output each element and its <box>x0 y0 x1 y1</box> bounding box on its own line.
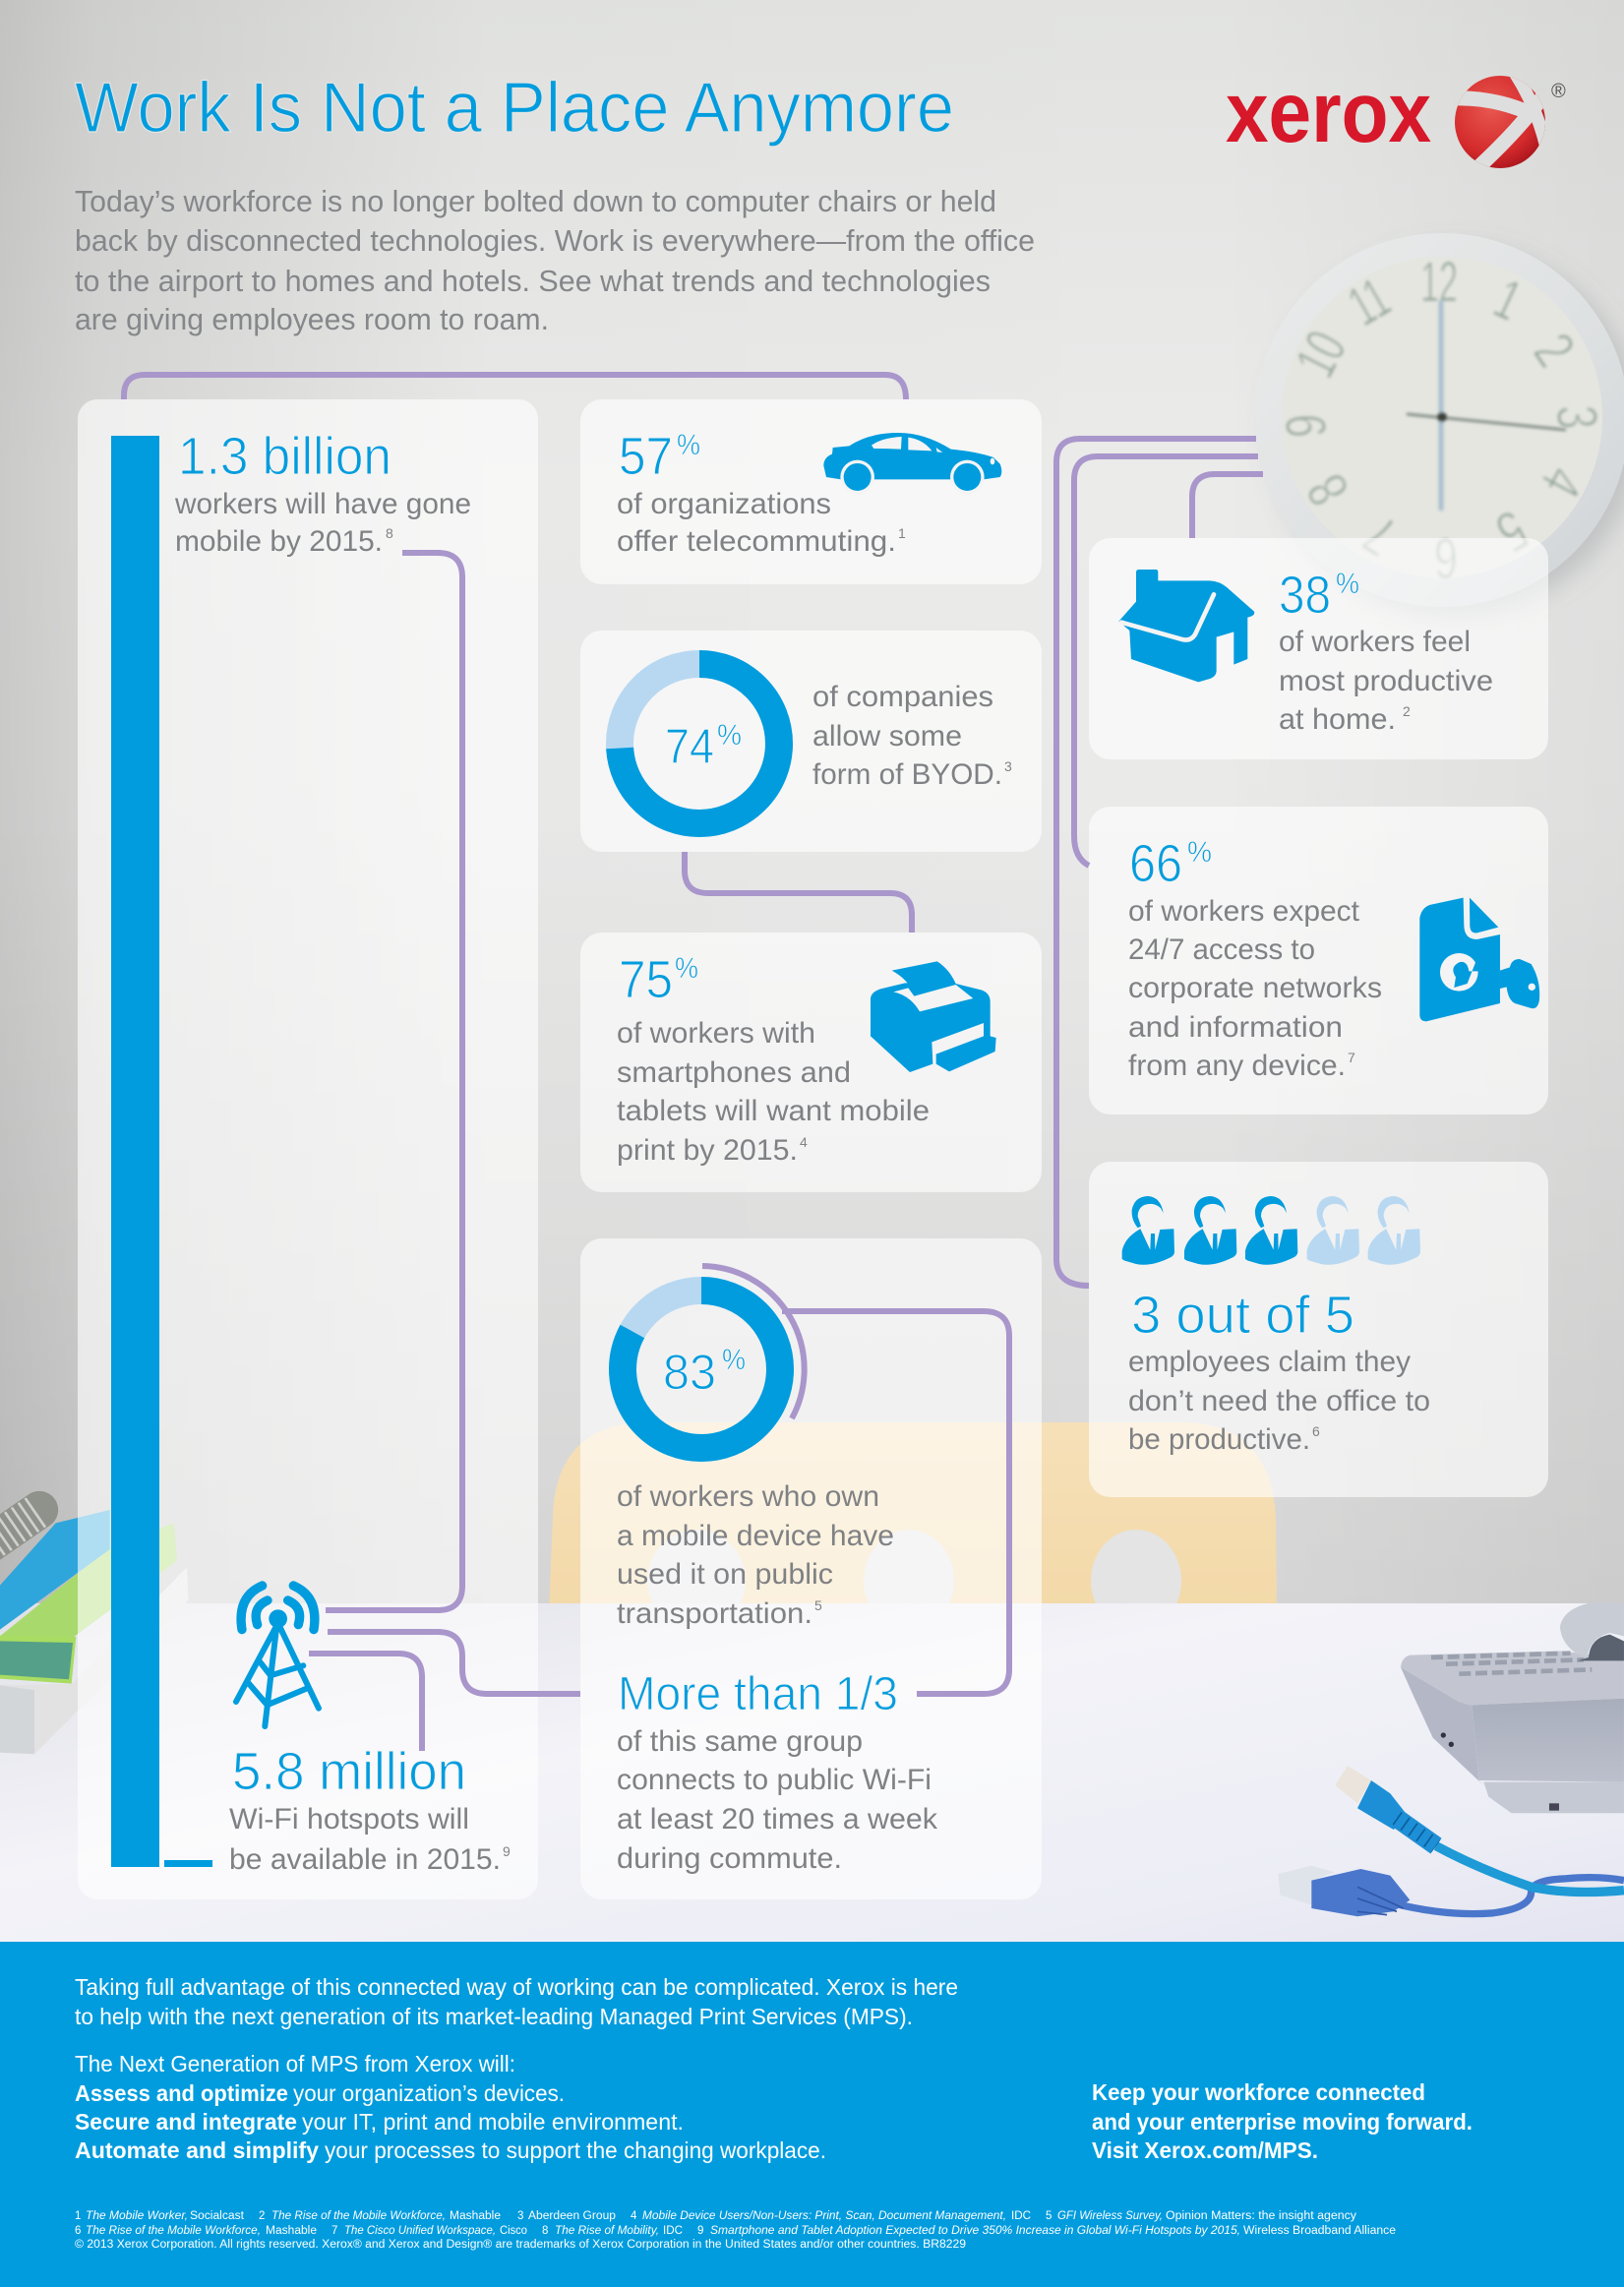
wall clock: 10 <box>1284 322 1358 387</box>
background wall <box>0 0 1624 1613</box>
chart: 74% BYOD donut: % <box>717 719 742 752</box>
stat: 3 out of 5: don’t need the office to <box>1128 1385 1430 1417</box>
footnotes: Aberdeen Group <box>528 2210 616 2222</box>
footnotes: © 2013 Xerox Corporation. All rights reserved. Xerox® and Xerox and Design® are trademarks of Xerox Corporation in the United States and/or other countries. BR8229 <box>75 2239 966 2251</box>
panel: public transportation <box>580 1238 1042 1899</box>
text: BYOD: of companies <box>812 681 993 713</box>
footnotes: 9 <box>697 2225 703 2237</box>
footnotes: 8 <box>542 2225 548 2237</box>
icon: wifi tower <box>236 1586 319 1726</box>
chair <box>549 1422 1277 1632</box>
stat: 5.8 million hotspots: Wi-Fi hotspots will <box>229 1803 469 1836</box>
stat: 38% at home: most productive <box>1279 665 1493 697</box>
wall clock <box>1255 233 1624 616</box>
icon: printer <box>871 961 996 1072</box>
footnotes: The Rise of the Mobile Workforce, <box>86 2225 261 2237</box>
footnotes: Mashable <box>450 2210 501 2222</box>
stat: 57% telecommuting: 1 <box>898 525 906 541</box>
bar chart: 1.3 billion vs 5.8 million <box>111 436 212 1867</box>
text: BYOD <box>812 681 1012 791</box>
footer: next generation list: your organization’s devices. <box>293 2080 565 2106</box>
logo: xerox: xerox <box>1226 65 1431 160</box>
stat: 3 out of 5: 6 <box>1312 1423 1320 1439</box>
footnotes: Socialcast <box>190 2210 245 2222</box>
title: Work Is Not a Place Anymore <box>75 69 954 148</box>
text: public transportation: a mobile device have <box>617 1520 894 1552</box>
footnotes: 5 <box>1046 2210 1052 2222</box>
wall clock: 3 <box>1544 404 1609 430</box>
wall clock: 5 <box>1485 498 1538 565</box>
footer: intro text: Taking full advantage of this connected way of working can be complicated. Xerox is here <box>75 1974 958 2000</box>
stat: 75% mobile print: smartphones and <box>617 1056 851 1089</box>
wall clock: 1 <box>1484 267 1532 333</box>
footer: call to action: Visit Xerox.com/MPS. <box>1092 2137 1318 2163</box>
intro text: to the airport to homes and hotels. See what trends and technologies <box>75 264 991 298</box>
wall clock: 12 <box>1420 250 1458 315</box>
text: public transportation: used it on public <box>617 1558 833 1591</box>
stat: 38% at home: 38 <box>1279 566 1331 625</box>
stat: 57% telecommuting <box>617 427 906 558</box>
panel: 24/7 access <box>1089 807 1548 1114</box>
network cable <box>1278 1766 1624 1916</box>
stat: 66% 24/7 access: 66 <box>1129 834 1182 893</box>
footer: next generation list <box>75 2051 826 2163</box>
text: BYOD: allow some <box>812 720 962 752</box>
stat: 5.8 million hotspots <box>229 1742 511 1876</box>
footnotes: IDC <box>663 2225 683 2237</box>
panel: BYOD <box>580 631 1042 852</box>
connector lines <box>124 375 1263 1751</box>
stat: 5.8 million hotspots: 5.8 million <box>232 1742 466 1801</box>
text: BYOD: form of BYOD. <box>812 758 1002 791</box>
stat: 38% at home <box>1279 566 1493 736</box>
footnotes: GFI Wireless Survey, <box>1057 2210 1163 2222</box>
wall clock: 11 <box>1338 266 1401 338</box>
logo: xerox: ® <box>1551 81 1566 102</box>
wall clock: 2 <box>1521 323 1588 378</box>
footnotes: IDC <box>1011 2210 1031 2222</box>
footer: next generation list: Assess and optimize <box>75 2080 288 2106</box>
binders <box>0 1510 189 1754</box>
stat: more than 1/3: More than 1/3 <box>618 1668 898 1720</box>
stat: 1.3 billion workers: 8 <box>386 525 393 541</box>
stat: 66% 24/7 access: from any device. <box>1128 1050 1346 1082</box>
intro text: Today’s workforce is no longer bolted down to computer chairs or held <box>75 184 996 218</box>
footnotes: Mobile Device Users/Non-Users: Print, Scan, Document Management, <box>642 2210 1006 2222</box>
stat: 1.3 billion workers: 1.3 billion <box>178 427 391 486</box>
wall clock: 8 <box>1294 463 1361 516</box>
stat: 38% at home: 2 <box>1403 703 1411 719</box>
footer: intro text <box>75 1974 958 2029</box>
stat: 75% mobile print: of workers with <box>617 1017 815 1050</box>
footnotes: 7 <box>331 2225 337 2237</box>
stat: 3 out of 5 <box>1128 1286 1430 1456</box>
footnotes: Smartphone and Tablet Adoption Expected to Drive 350% Increase in Global Wi-Fi Hotspots by 2015, <box>710 2225 1240 2237</box>
wall clock: 9 <box>1274 413 1339 439</box>
stat: 3 out of 5: 3 out of 5 <box>1131 1286 1354 1345</box>
panel: mobile workers column <box>78 399 538 1899</box>
panel: telecommuting <box>580 399 1042 584</box>
logo: xerox <box>1226 76 1566 168</box>
text: BYOD: 3 <box>1004 758 1012 774</box>
stat: 75% mobile print <box>617 950 930 1167</box>
footnotes: 6 <box>75 2225 81 2237</box>
footnotes <box>75 2210 1396 2251</box>
wall clock: 6 <box>1434 525 1458 590</box>
chart: 83% public transit donut: % <box>722 1344 746 1376</box>
stat: 5.8 million hotspots: be available in 2015. <box>229 1843 501 1876</box>
chart: 74% BYOD donut <box>620 664 779 823</box>
wall clock: 4 <box>1529 456 1595 508</box>
footer band <box>0 1942 1624 2287</box>
stat: 75% mobile print: 4 <box>800 1134 808 1150</box>
stat: 5.8 million hotspots: 9 <box>503 1843 511 1859</box>
intro text: back by disconnected technologies. Work is everywhere—from the office <box>75 223 1035 258</box>
footer: next generation list: your processes to support the changing workplace. <box>325 2137 826 2163</box>
footnotes: Mashable <box>266 2225 317 2237</box>
footnotes: The Rise of Mobility, <box>555 2225 659 2237</box>
text: public transportation: 5 <box>814 1597 822 1613</box>
panel: productive at home <box>1089 538 1548 759</box>
text: public transportation <box>617 1480 894 1630</box>
stat: 38% at home: of workers feel <box>1279 626 1471 658</box>
icon: house <box>1118 570 1254 682</box>
stat: 66% 24/7 access: corporate networks <box>1128 972 1382 1004</box>
panel: mobile print <box>580 933 1042 1192</box>
stat: 3 out of 5: be productive. <box>1128 1423 1310 1456</box>
stat: 57% telecommuting: offer telecommuting. <box>617 525 896 558</box>
footer: call to action: Keep your workforce connected <box>1092 2079 1425 2105</box>
stat: 66% 24/7 access: % <box>1187 836 1212 869</box>
stat: 57% telecommuting: 57 <box>619 427 673 486</box>
stat: more than 1/3: connects to public Wi-Fi <box>617 1764 932 1796</box>
chart: 83% public transit donut: 83 <box>663 1345 716 1400</box>
stat: more than 1/3: of this same group <box>617 1725 863 1758</box>
stat: more than 1/3: at least 20 times a week <box>617 1803 938 1836</box>
stat: 66% 24/7 access <box>1128 834 1382 1082</box>
footnotes: Opinion Matters: the insight agency <box>1166 2210 1356 2222</box>
chart: 83% public transit donut <box>623 1291 780 1448</box>
stat: 75% mobile print: 75 <box>619 950 673 1009</box>
footer: next generation list: Secure and integrate <box>75 2109 297 2135</box>
text: public transportation: of workers who own <box>617 1480 879 1513</box>
footnotes: 4 <box>631 2210 637 2222</box>
footnotes: The Cisco Unified Workspace, <box>344 2225 496 2237</box>
stat: 75% mobile print: % <box>675 952 698 985</box>
footnotes: The Mobile Worker, <box>86 2210 188 2222</box>
footer: next generation list: Automate and simplify <box>75 2137 319 2163</box>
icon row: 3 of 5 people <box>1122 1196 1420 1265</box>
panel: 3 out of 5 <box>1089 1162 1548 1497</box>
stat: 38% at home: at home. <box>1279 703 1396 736</box>
footer: call to action <box>1092 2079 1473 2163</box>
footnotes: Wireless Broadband Alliance <box>1243 2225 1396 2237</box>
footnotes: 2 <box>259 2210 265 2222</box>
footnotes: Cisco <box>500 2225 527 2237</box>
stat: 1.3 billion workers: mobile by 2015. <box>175 525 383 558</box>
stat: 1.3 billion workers: workers will have gone <box>174 488 471 520</box>
stat: 1.3 billion workers <box>174 427 471 558</box>
footnotes: 1 <box>75 2210 81 2222</box>
icon: car <box>823 433 1001 494</box>
footnotes: 3 <box>517 2210 523 2222</box>
intro text: are giving employees room to roam. <box>75 302 549 336</box>
stat: 57% telecommuting: of organizations <box>617 488 831 520</box>
chart: 74% BYOD donut: 74 <box>665 719 714 774</box>
wall clock: 7 <box>1353 502 1407 569</box>
icon: locked file with key <box>1419 898 1539 1021</box>
footer: call to action: and your enterprise moving forward. <box>1092 2109 1473 2135</box>
text: public transportation: transportation. <box>617 1597 812 1630</box>
telephone <box>1401 1601 1624 1813</box>
stat: more than 1/3: during commute. <box>617 1842 842 1875</box>
stat: more than 1/3 <box>617 1668 938 1875</box>
footer: next generation list: The Next Generation of MPS from Xerox will: <box>75 2051 515 2076</box>
stat: 57% telecommuting: % <box>677 429 700 461</box>
stat: 75% mobile print: print by 2015. <box>617 1134 798 1167</box>
footnotes: The Rise of the Mobile Workforce, <box>271 2210 446 2222</box>
stat: 66% 24/7 access: 24/7 access to <box>1128 933 1315 966</box>
stat: 66% 24/7 access: 7 <box>1348 1050 1355 1065</box>
stat: 66% 24/7 access: and information <box>1128 1011 1343 1044</box>
stat: 38% at home: % <box>1336 568 1359 600</box>
stat: 66% 24/7 access: of workers expect <box>1128 895 1360 928</box>
desk surface <box>0 1603 1624 1942</box>
footer: intro text: to help with the next generation of its market-leading Managed Print Services (MPS). <box>75 2004 913 2029</box>
stat: 75% mobile print: tablets will want mobile <box>617 1095 930 1127</box>
footer: next generation list: your IT, print and mobile environment. <box>302 2109 684 2135</box>
intro text <box>75 184 1035 336</box>
stat: 3 out of 5: employees claim they <box>1128 1346 1411 1378</box>
